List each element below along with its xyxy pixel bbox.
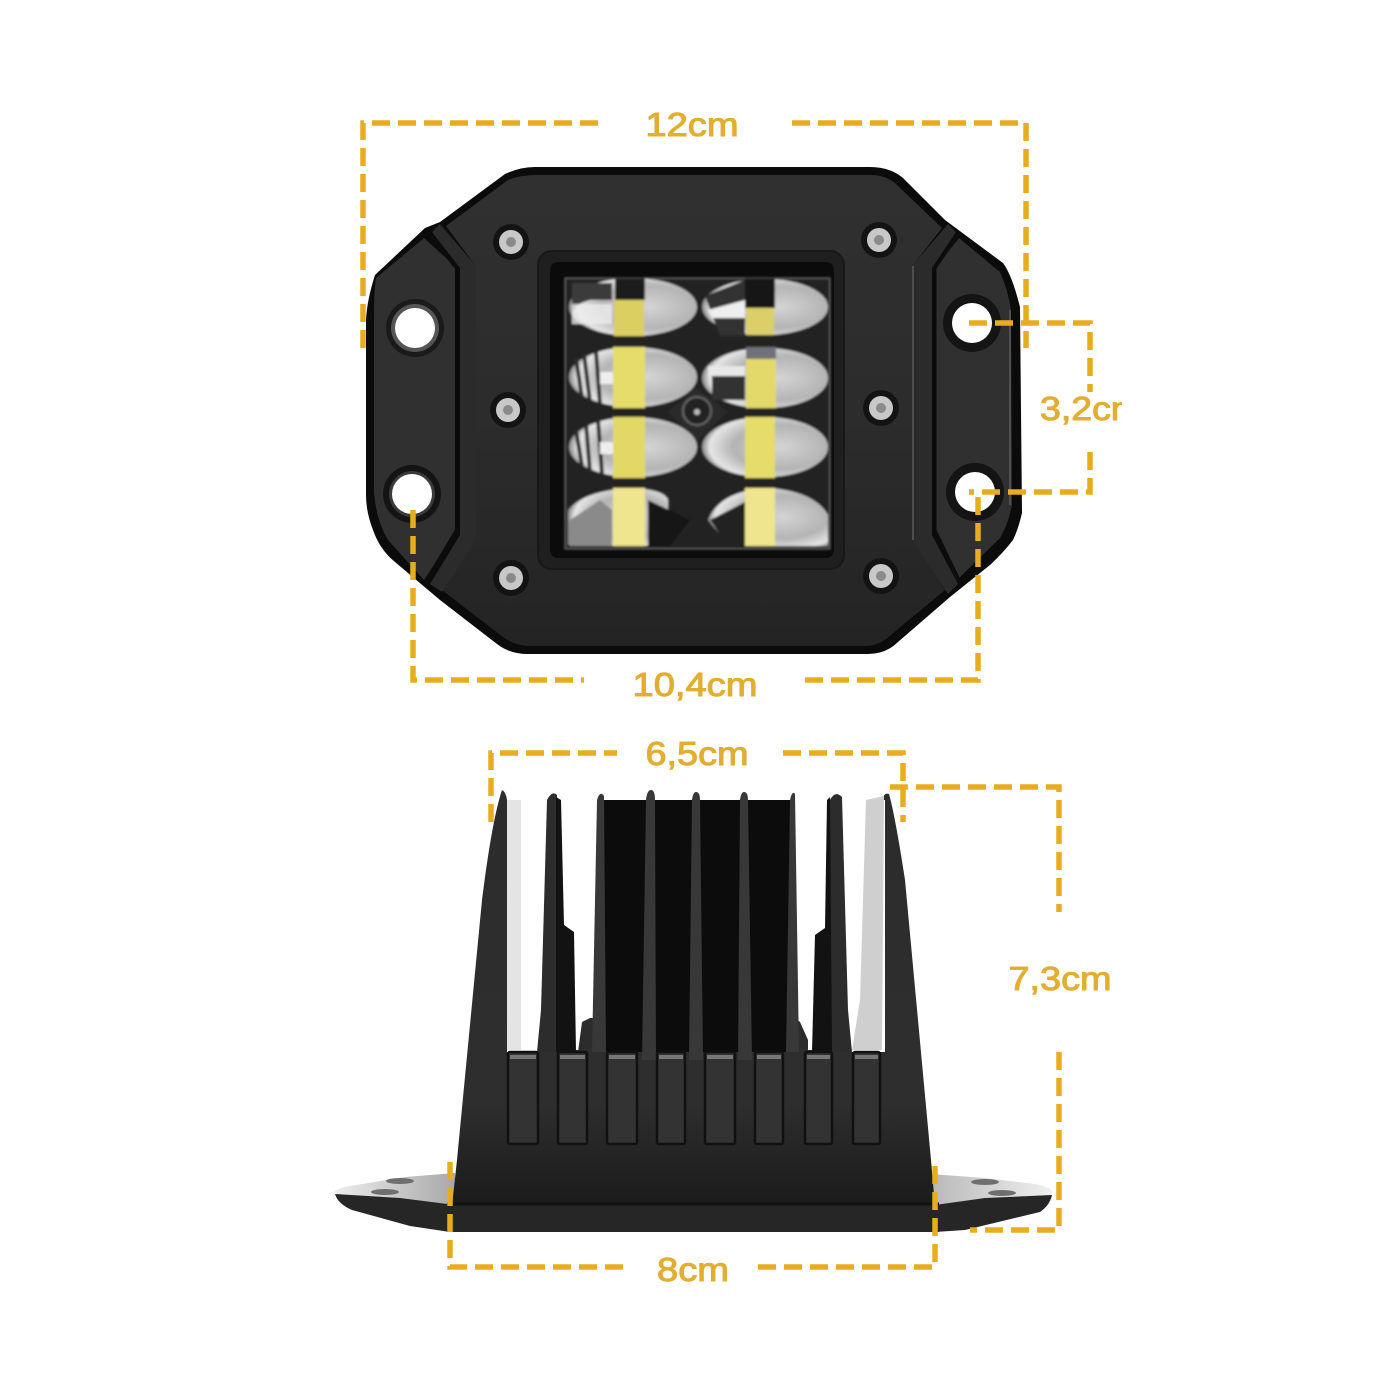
left ear seam <box>426 230 457 582</box>
mounting plate outline <box>366 167 1022 654</box>
black core between fins <box>600 800 794 1052</box>
right band highlight <box>913 266 1010 540</box>
white gap left inner <box>563 800 599 1050</box>
white gap right inner <box>795 800 828 1050</box>
white gap left <box>507 800 547 1052</box>
dimension: depth 7,3cm <box>890 787 1112 1230</box>
center plate face <box>442 175 945 646</box>
heat sink body <box>452 790 935 1206</box>
lens window inner frame <box>550 262 834 558</box>
dimension: hole height 3,2cm <box>969 323 1142 492</box>
center fins <box>592 790 799 1060</box>
right lens column <box>702 278 828 546</box>
right band <box>912 224 958 594</box>
panel: front view of light <box>366 167 1022 654</box>
dimension: hole spacing 10,4cm <box>413 494 978 703</box>
center sensor <box>668 388 728 440</box>
dimension: base width 8cm: 8cm <box>657 1251 729 1288</box>
white gap right <box>848 800 885 1052</box>
base highlight line <box>447 1202 939 1206</box>
mounting flange right top <box>930 1174 1053 1206</box>
flange holes <box>371 1178 1016 1196</box>
dimension: base width 8cm <box>450 1162 935 1288</box>
mounting holes <box>383 294 1004 523</box>
dimension: overall width 12cm: 12cm <box>646 106 738 143</box>
dimension: depth 7,3cm: 7,3cm <box>1008 960 1112 997</box>
right ear face <box>935 238 1012 580</box>
dimension: body width 6,5cm <box>491 735 903 822</box>
dimension: overall width 12cm <box>363 106 1026 348</box>
mounting flange left top <box>334 1173 455 1206</box>
silver strip left <box>507 800 521 1050</box>
left ear face <box>374 238 457 580</box>
left lens column <box>568 278 697 546</box>
LED lens panel <box>565 278 830 549</box>
infographic: LED work light dimensions <box>334 112 1122 1282</box>
left outer fins <box>537 793 600 1052</box>
flange underside <box>335 1194 1052 1232</box>
right ear seam <box>935 232 960 582</box>
base slots <box>508 1052 880 1144</box>
dimension: body width 6,5cm: 6,5cm <box>646 735 748 772</box>
right outer fins <box>795 794 852 1052</box>
silver strip right <box>852 796 884 1050</box>
lower base strip <box>447 1205 939 1232</box>
panel: side view of light <box>334 790 1053 1232</box>
left band <box>430 224 476 592</box>
slot highlights <box>510 1055 878 1059</box>
screws <box>490 222 899 596</box>
dimension: hole height 3,2cm: 3,2cm <box>1040 390 1142 427</box>
dimension: hole spacing 10,4cm: 10,4cm <box>632 666 758 703</box>
lens window frame <box>538 251 844 569</box>
